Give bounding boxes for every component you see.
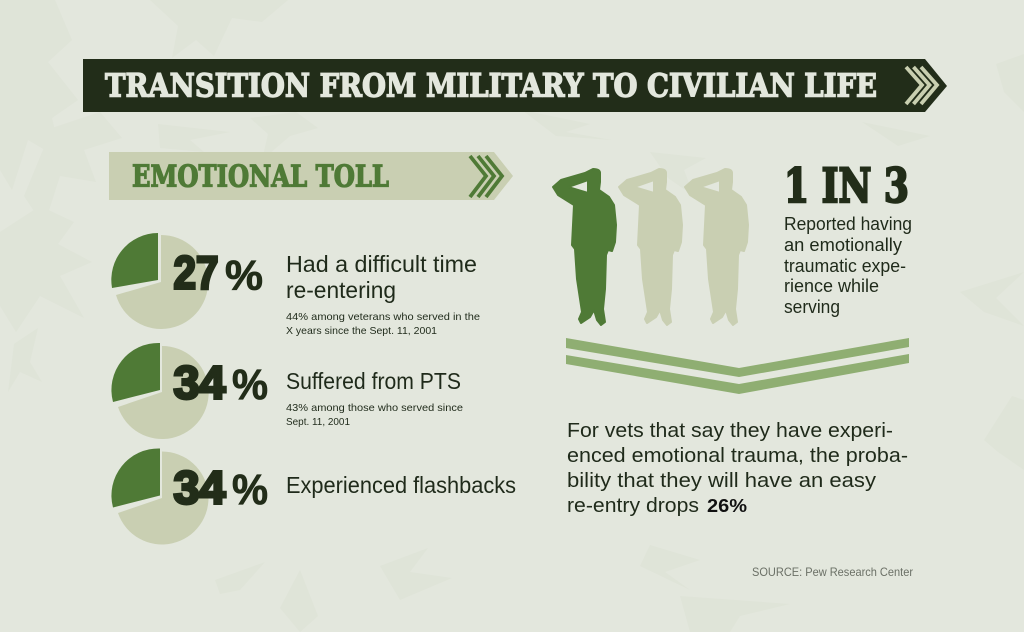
label: re-entering — [286, 277, 396, 303]
stat: 34 percent flashbacks — [111, 448, 516, 544]
description: rience while — [784, 276, 879, 296]
description: Reported having — [784, 214, 912, 234]
section heading: emotional toll — [109, 152, 513, 200]
figure 34 percent: 34 — [174, 356, 226, 408]
stat: 27 percent — [111, 233, 480, 337]
text block: trauma probability: 26% — [707, 496, 747, 516]
pie chart 34 percent — [111, 448, 209, 544]
label: Experienced flashbacks — [286, 472, 516, 498]
figure 34 percent: % — [232, 361, 268, 409]
stat: 34 percent PTS — [111, 343, 463, 439]
description: an emotionally — [784, 235, 902, 255]
figure 1 in 3: 1 IN 3 — [784, 159, 909, 214]
text block: trauma probability: For vets that say they have experi- — [567, 419, 893, 442]
text block: trauma probability: bility that they will have an easy — [567, 469, 877, 492]
note: 43% among those who served since — [286, 402, 463, 414]
text block: trauma probability: enced emotional trauma, the proba- — [567, 444, 908, 467]
label: Suffered from PTS — [286, 368, 461, 394]
icon: banner chevrons — [906, 67, 937, 104]
figure 27 percent: % — [225, 252, 263, 298]
pie chart 27 percent — [111, 233, 208, 329]
note: X years since the Sept. 11, 2001 — [286, 325, 437, 337]
source: SOURCE: Pew Research Center — [752, 565, 913, 579]
text block: trauma probability: re-entry drops — [567, 494, 699, 517]
icon: soldier highlighted — [553, 169, 616, 325]
figure 27 percent: 27 — [174, 246, 218, 298]
figure 34 percent: 34 — [174, 462, 226, 514]
description: traumatic expe- — [784, 256, 906, 276]
icon: double chevron divider — [566, 338, 909, 394]
icon: soldier muted — [685, 169, 748, 325]
stat: 1 in 3 — [784, 159, 912, 317]
label: Had a difficult time — [286, 251, 477, 277]
pie chart 34 percent — [111, 343, 209, 439]
icon: soldier muted — [619, 169, 682, 325]
description: serving — [784, 297, 840, 317]
note: 44% among veterans who served in the — [286, 311, 480, 323]
note: Sept. 11, 2001 — [286, 416, 350, 428]
icon: section chevrons — [470, 156, 502, 197]
title: TRANSITION FROM MILITARY TO CIVILIAN LIFE — [105, 66, 877, 104]
icon: saluting soldiers — [553, 169, 748, 325]
section heading text: EMOTIONAL TOLL — [132, 158, 389, 194]
figure 34 percent: % — [232, 466, 268, 514]
title banner — [83, 59, 947, 112]
